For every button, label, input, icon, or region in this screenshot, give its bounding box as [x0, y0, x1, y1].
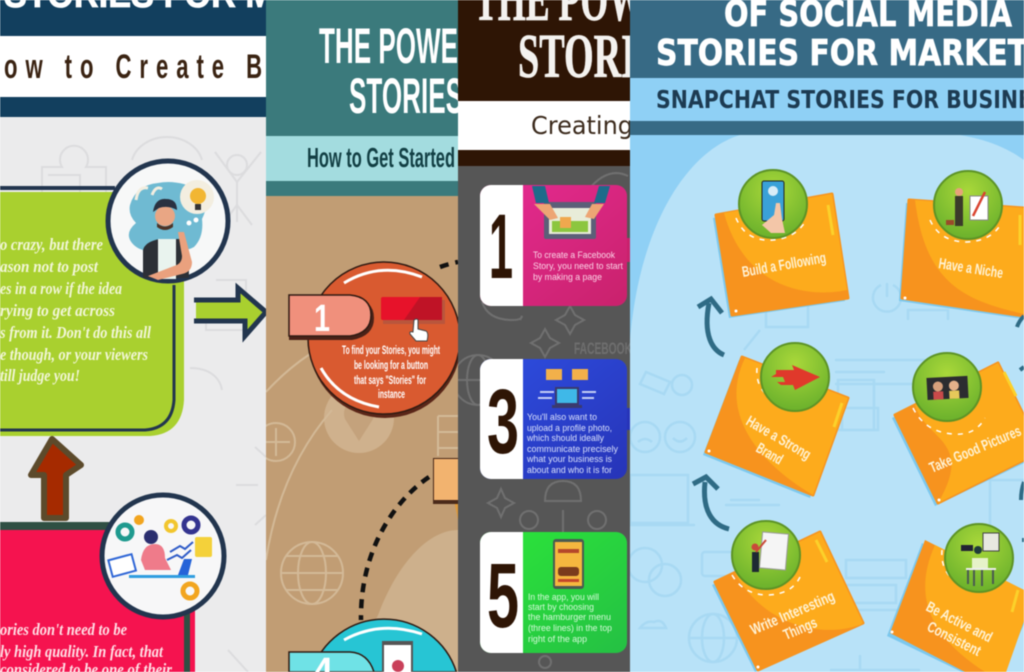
step card 5: start by choosing [528, 602, 594, 612]
green text card [0, 188, 184, 436]
green text card: till judge you! [0, 366, 80, 385]
title [478, 0, 631, 79]
card: have a niche [899, 171, 1024, 319]
green text card: e though, or your viewers [0, 345, 148, 364]
icon: red arrow [771, 365, 820, 390]
step 1 badge: 1 [314, 298, 330, 340]
step card 3 [480, 359, 630, 479]
icon: hand with phone [762, 181, 785, 233]
title [318, 27, 459, 114]
step 1 text: be looking for a button [354, 358, 428, 372]
icon: thinking man [108, 161, 228, 281]
arrow: right [194, 288, 266, 336]
step card 5: the hamburger menu [528, 612, 611, 622]
icon: phone with burger menu [553, 539, 584, 589]
icon: person at desk with gears [102, 495, 224, 617]
subtitle: ow to Create B [4, 48, 262, 86]
card: be active and consistent: Be Active and [923, 598, 995, 646]
card: be active and consistent [887, 524, 1024, 672]
panel: creating facebook stories (third) [453, 0, 644, 672]
step card 3: what your business is [526, 454, 612, 464]
card: have a strong brand [703, 343, 848, 498]
step card 5 [480, 532, 627, 653]
panel: how to get started (second) [257, 0, 463, 672]
green text card: rying to get across [0, 301, 115, 320]
step 1 circle [308, 262, 461, 418]
phone [382, 641, 413, 672]
step card 1: Story, you need to start [533, 261, 623, 271]
subtitle: How to Get Started [307, 142, 455, 173]
faint word FACEBOOK: FACEBOOK [574, 339, 632, 358]
step 1 text: To find your Stories, you might [342, 343, 440, 357]
faint background icons [628, 283, 1024, 670]
step card 3: 3 [487, 371, 519, 473]
card: build a following: Build a Following [741, 249, 827, 281]
step card 3: communicate precisely [527, 444, 618, 454]
title [656, 0, 1024, 74]
header band [630, 0, 1024, 135]
step 1 text: that says "Stories" for [354, 373, 426, 387]
step card 1: by making a page [533, 272, 602, 282]
green text card: o crazy, but there [0, 235, 103, 254]
title: THE POWE [319, 18, 458, 74]
step card 3: which should ideally [526, 433, 604, 443]
card: write interesting things: Write Interesting [748, 588, 837, 639]
pale background shapes [257, 354, 458, 672]
green text card: es in a row if the idea [0, 279, 122, 298]
icon: woman working at desk [961, 533, 999, 586]
header band [458, 0, 630, 166]
card: have a strong brand: Brand [753, 440, 786, 468]
pink text card: ly high quality. In fact, that [0, 642, 164, 661]
orange step box [433, 458, 458, 520]
icon: tablet with hands [532, 186, 610, 239]
panel: snapchat stories for business (right) [628, 0, 1024, 672]
step 1 text [342, 343, 440, 401]
curved arrow: to have a strong brand [693, 477, 729, 529]
title: STORI [518, 23, 636, 91]
step 1 badge [289, 295, 374, 340]
step card 5: 5 [487, 545, 519, 647]
curved arrow: to build a following [698, 299, 724, 355]
red button [381, 297, 445, 324]
step card 3: upload a profile photo, [527, 423, 612, 433]
icon: selfie photo [926, 376, 969, 400]
title: STORIES [349, 68, 463, 124]
subtitle: Creating [531, 111, 633, 140]
card: have a strong brand: Have a Strong [743, 413, 814, 463]
header band [0, 0, 266, 117]
step 1 text: instance [378, 387, 405, 401]
card: build a following [713, 170, 848, 318]
step card 1: 1 [489, 196, 513, 298]
step card 5: (three lines) in the top [528, 623, 612, 633]
icon: writer with notepad [752, 532, 789, 572]
faint background icons [453, 173, 628, 668]
arrow fragments at right edge [1017, 316, 1024, 540]
hand cursor [410, 319, 428, 341]
step card 1: To create a Facebook [533, 250, 615, 260]
pink text card [0, 522, 195, 672]
pink text card: ories don't need to be [0, 620, 127, 639]
card: be active and consistent: Consistent [924, 618, 984, 660]
card: write interesting things [712, 521, 863, 672]
step card 3: You'll also want to [527, 412, 597, 422]
header band [266, 0, 458, 196]
green text card: ason not to post [0, 257, 99, 276]
icon: folders and computer [538, 369, 596, 408]
card: write interesting things: Things [781, 614, 820, 644]
step card 1 [480, 185, 630, 306]
card: take good pictures [892, 353, 1024, 506]
panel: how to create stories (left) [0, 0, 274, 672]
icon: presenter with board [946, 188, 988, 226]
step 4 circle [312, 619, 456, 672]
dashed connector [361, 262, 458, 620]
step card 5: right of the app [528, 634, 587, 644]
green text card: s from it. Don't do this all [0, 323, 151, 342]
step card 3: about and who it is for [527, 465, 612, 475]
arrow: up [31, 439, 81, 518]
step 4 badge [289, 651, 374, 672]
step card 5: In the app, you will [528, 592, 599, 602]
